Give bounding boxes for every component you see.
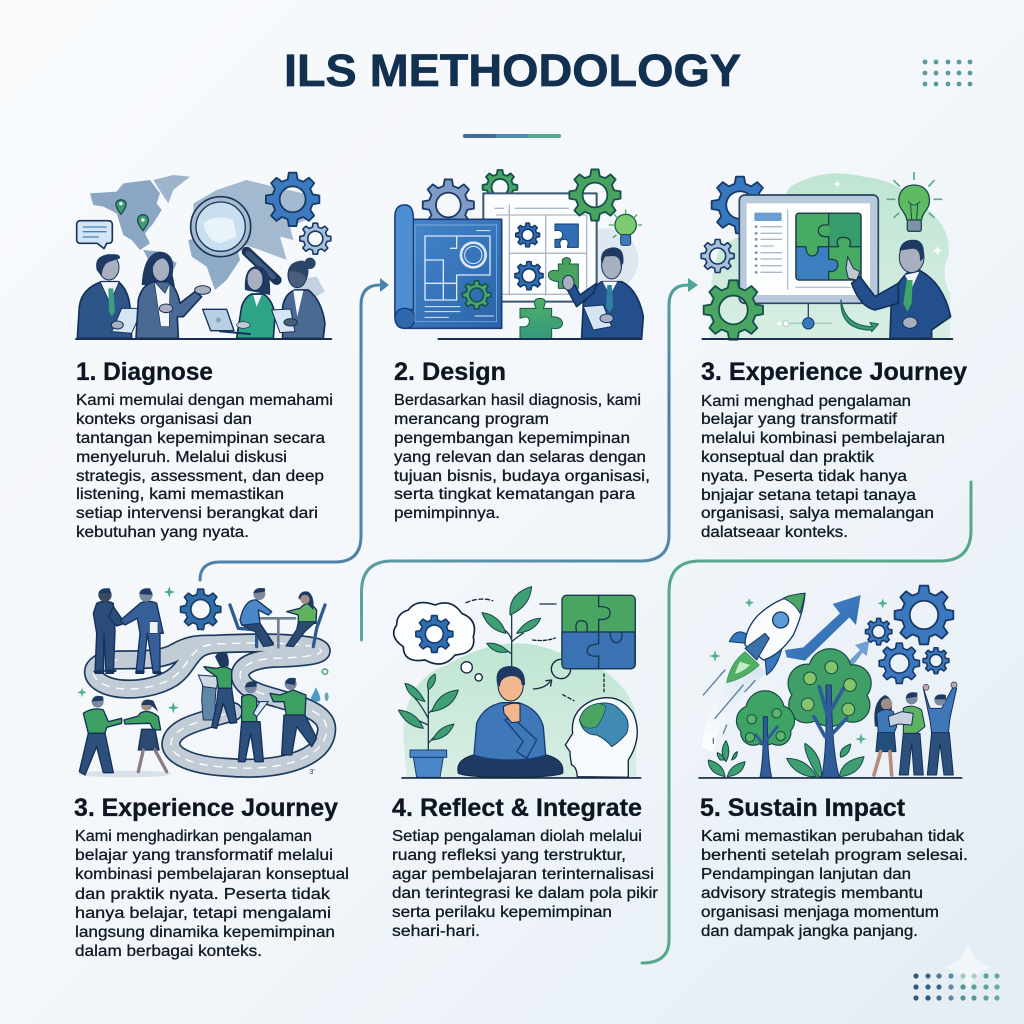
seated person: [458, 666, 563, 777]
sparkles: [77, 586, 179, 713]
green backdrop blob: [403, 643, 637, 777]
text: experience journey lower: dan praktik nyata. Peserta tidak: [75, 886, 330, 903]
gear: [181, 589, 221, 629]
large apple tree: [789, 649, 871, 777]
text: experience journey upper: nyata. Peserta tidak hanya: [701, 468, 907, 485]
small tree: [737, 691, 794, 777]
two green shirt men on road: [238, 678, 317, 762]
light bulb: [609, 210, 642, 245]
text: sustain impact: [701, 828, 968, 940]
text: sustain impact: advisory strategis membantu: [701, 885, 923, 902]
blueprint scroll: [395, 205, 502, 328]
text: diagnose: strategis, assessment, dan deep: [76, 468, 324, 485]
gears: [266, 173, 319, 226]
winding road: [93, 643, 327, 768]
heading: reflect and integrate: 4. Reflect & Integrate: [392, 794, 642, 822]
text: diagnose: listening, kami memastikan: [76, 486, 284, 503]
illustration: reflect and integrate: [394, 587, 641, 778]
small number mark: 3': [309, 767, 315, 776]
text: experience journey lower: kombinasi pembelajaran konseptual: [75, 866, 349, 883]
illustration: road journey: [77, 586, 329, 777]
text: reflect and integrate: [392, 828, 658, 940]
text: design: merancang program: [394, 411, 549, 428]
text: diagnose: Kami memulai dengan memahami: [76, 392, 333, 409]
thought cloud: [394, 603, 482, 681]
growing plant: [482, 587, 541, 667]
text: experience journey upper: organisasi, salya memalangan: [701, 505, 934, 522]
text: experience journey lower: dalam berbagai konteks.: [75, 943, 262, 960]
green backdrop blob: [710, 173, 950, 338]
curved arrow: [841, 300, 878, 332]
text: diagnose: setiap intervensi berangkat dari: [76, 505, 318, 522]
text: sustain impact: Kami memastikan perubahan tidak: [701, 828, 964, 845]
large green gear: [569, 169, 621, 221]
sparkles: [709, 598, 888, 745]
centre group figures: [198, 652, 237, 728]
heading: sustain impact: 5. Sustain Impact: [700, 794, 906, 822]
magnifying glass: [191, 197, 277, 280]
text: diagnose: tantangan kepemimpinan secara: [76, 430, 325, 447]
puzzle on screen: [796, 213, 861, 280]
text: diagnose: [76, 392, 333, 541]
speech bubble: [77, 221, 112, 249]
text: sustain impact: organisasi menjaga momentum: [701, 904, 939, 921]
person 2: [136, 252, 211, 338]
man with document: [888, 692, 925, 775]
text: sustain impact: berhenti setelah program selesai.: [701, 847, 968, 864]
person 1: [77, 254, 143, 338]
cheering man: [923, 682, 957, 775]
back gears: [423, 179, 474, 231]
heading: design: 2. Design: [394, 358, 506, 386]
decorative dot grid top right: [923, 60, 972, 86]
handshake figures: [93, 588, 163, 674]
planning board: [483, 193, 597, 302]
text: design: tujuan bisnis, budaya organisasi,: [394, 468, 650, 485]
text: design: yang relevan dan selaras dengan: [394, 449, 646, 466]
text: reflect and integrate: serta perilaku kepemimpinan: [392, 904, 612, 921]
text: experience journey upper: belajar yang transformatif: [701, 411, 898, 428]
text: sustain impact: Pendampingan lanjutan dan: [701, 866, 911, 883]
world map: [90, 175, 325, 300]
gears: [712, 177, 768, 233]
head with brain: [565, 698, 637, 777]
meeting at table: [230, 588, 325, 647]
text: experience journey upper: bnjajar setana tetapi tanaya: [701, 487, 916, 504]
light bulb: [887, 173, 942, 231]
text: experience journey upper: konseptual dan praktik: [701, 449, 874, 466]
large green gear: [704, 280, 763, 340]
potted plant: [398, 674, 458, 777]
text: reflect and integrate: sehari-hari.: [392, 923, 480, 940]
presenter: [846, 240, 951, 338]
woman figure: [874, 695, 897, 775]
decorative star and dot grid bottom right: [913, 943, 1000, 1001]
text: experience journey upper: [701, 393, 945, 541]
growth arrows: [785, 595, 869, 665]
presenter: [563, 247, 643, 338]
white sparkles: [833, 180, 942, 255]
text: design: [394, 392, 650, 522]
gears: [895, 586, 953, 644]
text: design: pemimpinnya.: [394, 505, 500, 522]
title accent bar: [463, 134, 561, 138]
person 4: [272, 258, 325, 338]
person 3: [203, 266, 275, 338]
text: diagnose: konteks organisasi dan: [76, 411, 252, 428]
map pins: [116, 200, 148, 231]
text: design: Berdasarkan hasil diagnosis, kami: [394, 392, 641, 409]
text: diagnose: menyeluruh. Melalui diskusi: [76, 449, 287, 466]
connector circle and arrows: [466, 599, 604, 701]
rocket: [727, 593, 805, 683]
text: experience journey lower: [75, 828, 349, 960]
text: experience journey lower: langsung dinamika kepemimpinan: [75, 924, 335, 941]
illustration: diagnose: [76, 173, 331, 339]
text: experience journey lower: Kami menghadirkan pengalaman: [75, 828, 312, 845]
text: reflect and integrate: agar pembelajaran terinternalisasi: [392, 866, 654, 883]
ground shadows: [78, 771, 172, 777]
text: design: serta tingkat kematangan para: [394, 486, 636, 503]
bottom left pair: [79, 696, 167, 775]
heading: diagnose: 1. Diagnose: [76, 358, 213, 386]
text: experience journey lower: belajar yang transformatif melalui: [75, 847, 333, 864]
text: reflect and integrate: dan terintegrasi ke dalam pola pikir: [392, 885, 658, 902]
connector arrow: diagnose to design: [200, 278, 389, 580]
text: experience journey upper: Kami menghad pengalaman: [701, 393, 911, 410]
puzzle panel: [562, 595, 635, 669]
shrubs: [708, 741, 864, 777]
text: reflect and integrate: Setiap pengalaman diolah melalui: [392, 828, 642, 845]
text: sustain impact: dan dampak jangka panjang.: [701, 923, 918, 940]
heading: experience journey lower: 3. Experience Journey: [74, 794, 338, 822]
connector arrow: design to experience journey: [362, 278, 698, 640]
pale backdrop circle: [575, 228, 638, 292]
text: experience journey upper: melalui kombinasi pembelajaran: [701, 430, 945, 447]
heading: experience journey: 3. Experience Journey: [701, 358, 967, 386]
small droplet accents: [311, 669, 329, 702]
illustration: design: [395, 169, 643, 339]
text: reflect and integrate: ruang refleksi yang terstruktur,: [392, 847, 626, 864]
illustration: experience journey screen: [701, 173, 952, 340]
monitor: [739, 195, 878, 329]
text: experience journey upper: dalatseaar konteks.: [701, 524, 848, 541]
rocket exhaust trail: [702, 660, 767, 752]
illustration: sustain impact: [699, 586, 962, 778]
title: ILS METHODOLOGY: [284, 45, 741, 96]
big puzzle piece: [520, 298, 563, 339]
text: diagnose: kebutuhan yang nyata.: [76, 524, 249, 541]
text: experience journey lower: hanya belajar, tetapi mengalami: [75, 905, 331, 922]
connector line: experience journey to sustain impact: [642, 482, 971, 963]
text: design: pengembangan kepemimpinan: [394, 430, 630, 447]
